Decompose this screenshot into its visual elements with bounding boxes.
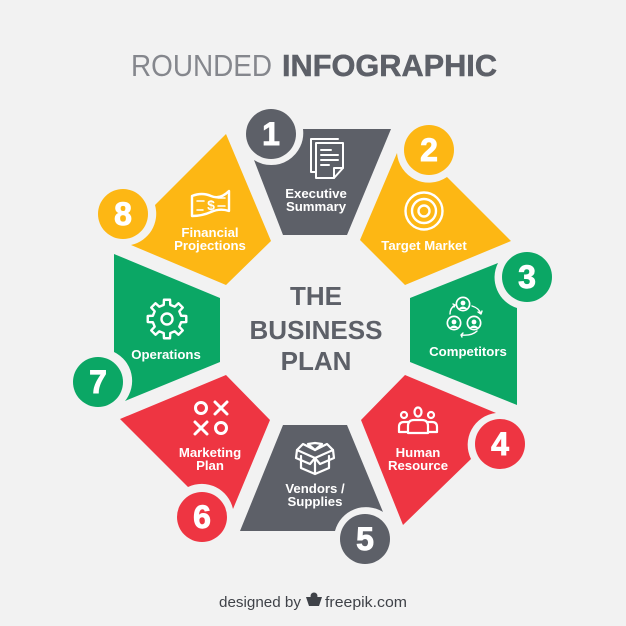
icon: people [399,408,437,433]
title: INFOGRAPHIC [282,49,497,83]
segment shape [114,254,220,401]
icon: target [406,192,442,230]
badge 7: 7 [89,364,107,400]
label: Summary [286,199,347,214]
center heading [250,281,382,376]
segment shape [120,375,270,509]
label: Operations [131,347,201,362]
badge 3: 3 [518,259,536,295]
panel: 7 operations [73,254,220,407]
icon: banknote [192,191,229,216]
panel: 5 vendors supplies [240,425,390,564]
icon: box [296,443,334,474]
label: Executive [285,186,347,201]
badge 5 [340,514,390,564]
panel: 6 marketing plan [120,375,270,542]
label [388,445,448,473]
segment shape [410,263,517,405]
badge 8 [98,189,148,239]
label [174,225,246,253]
panel: 2 target market [360,125,511,285]
badge 5: 5 [356,521,374,557]
badge 4: 4 [491,426,509,462]
label: Plan [196,458,224,473]
label: Human [396,445,440,460]
label: Vendors / [285,481,345,496]
segment shape [254,129,391,235]
panel: 8 financial projections [98,134,271,285]
icon: documents [311,139,343,178]
title: ROUNDED [131,49,272,83]
badge 6: 6 [193,499,211,535]
panel: 3 competitors [410,252,552,405]
icon: banknote: $ [207,197,215,213]
footer credit [219,592,407,611]
center heading: PLAN [281,346,351,376]
footer credit: freepik.com [325,594,407,611]
label: Supplies [288,494,342,509]
segment shape [131,134,271,285]
badge 1: 1 [262,116,280,152]
label: Competitors [429,344,507,359]
label: Projections [174,238,246,253]
badge 3 [502,252,552,302]
footer credit: designed by [219,594,301,611]
label [285,481,345,509]
label: Marketing [179,445,241,460]
segment shape [240,425,383,531]
badge 4 [475,419,525,469]
center heading: BUSINESS [250,315,382,345]
badge 7 [73,357,123,407]
label: Financial [181,225,239,240]
icon: gear [148,300,186,338]
label: Resource [388,458,448,473]
panel: 4 human resource [361,375,525,525]
panel: 1 executive summary [246,109,391,235]
segment shape [360,153,511,285]
badge 1 [246,109,296,159]
badge 6 [177,492,227,542]
label: Target Market [381,238,467,253]
icon: freepik logo [306,592,322,606]
badge 2: 2 [420,132,438,168]
segment shape [361,375,496,525]
icon: competitors cycle [446,296,482,337]
label [179,445,241,473]
label [285,186,347,214]
badge 2 [404,125,454,175]
icon: noughts and crosses [195,402,227,434]
badge 8: 8 [114,196,132,232]
center heading: THE [290,281,342,311]
